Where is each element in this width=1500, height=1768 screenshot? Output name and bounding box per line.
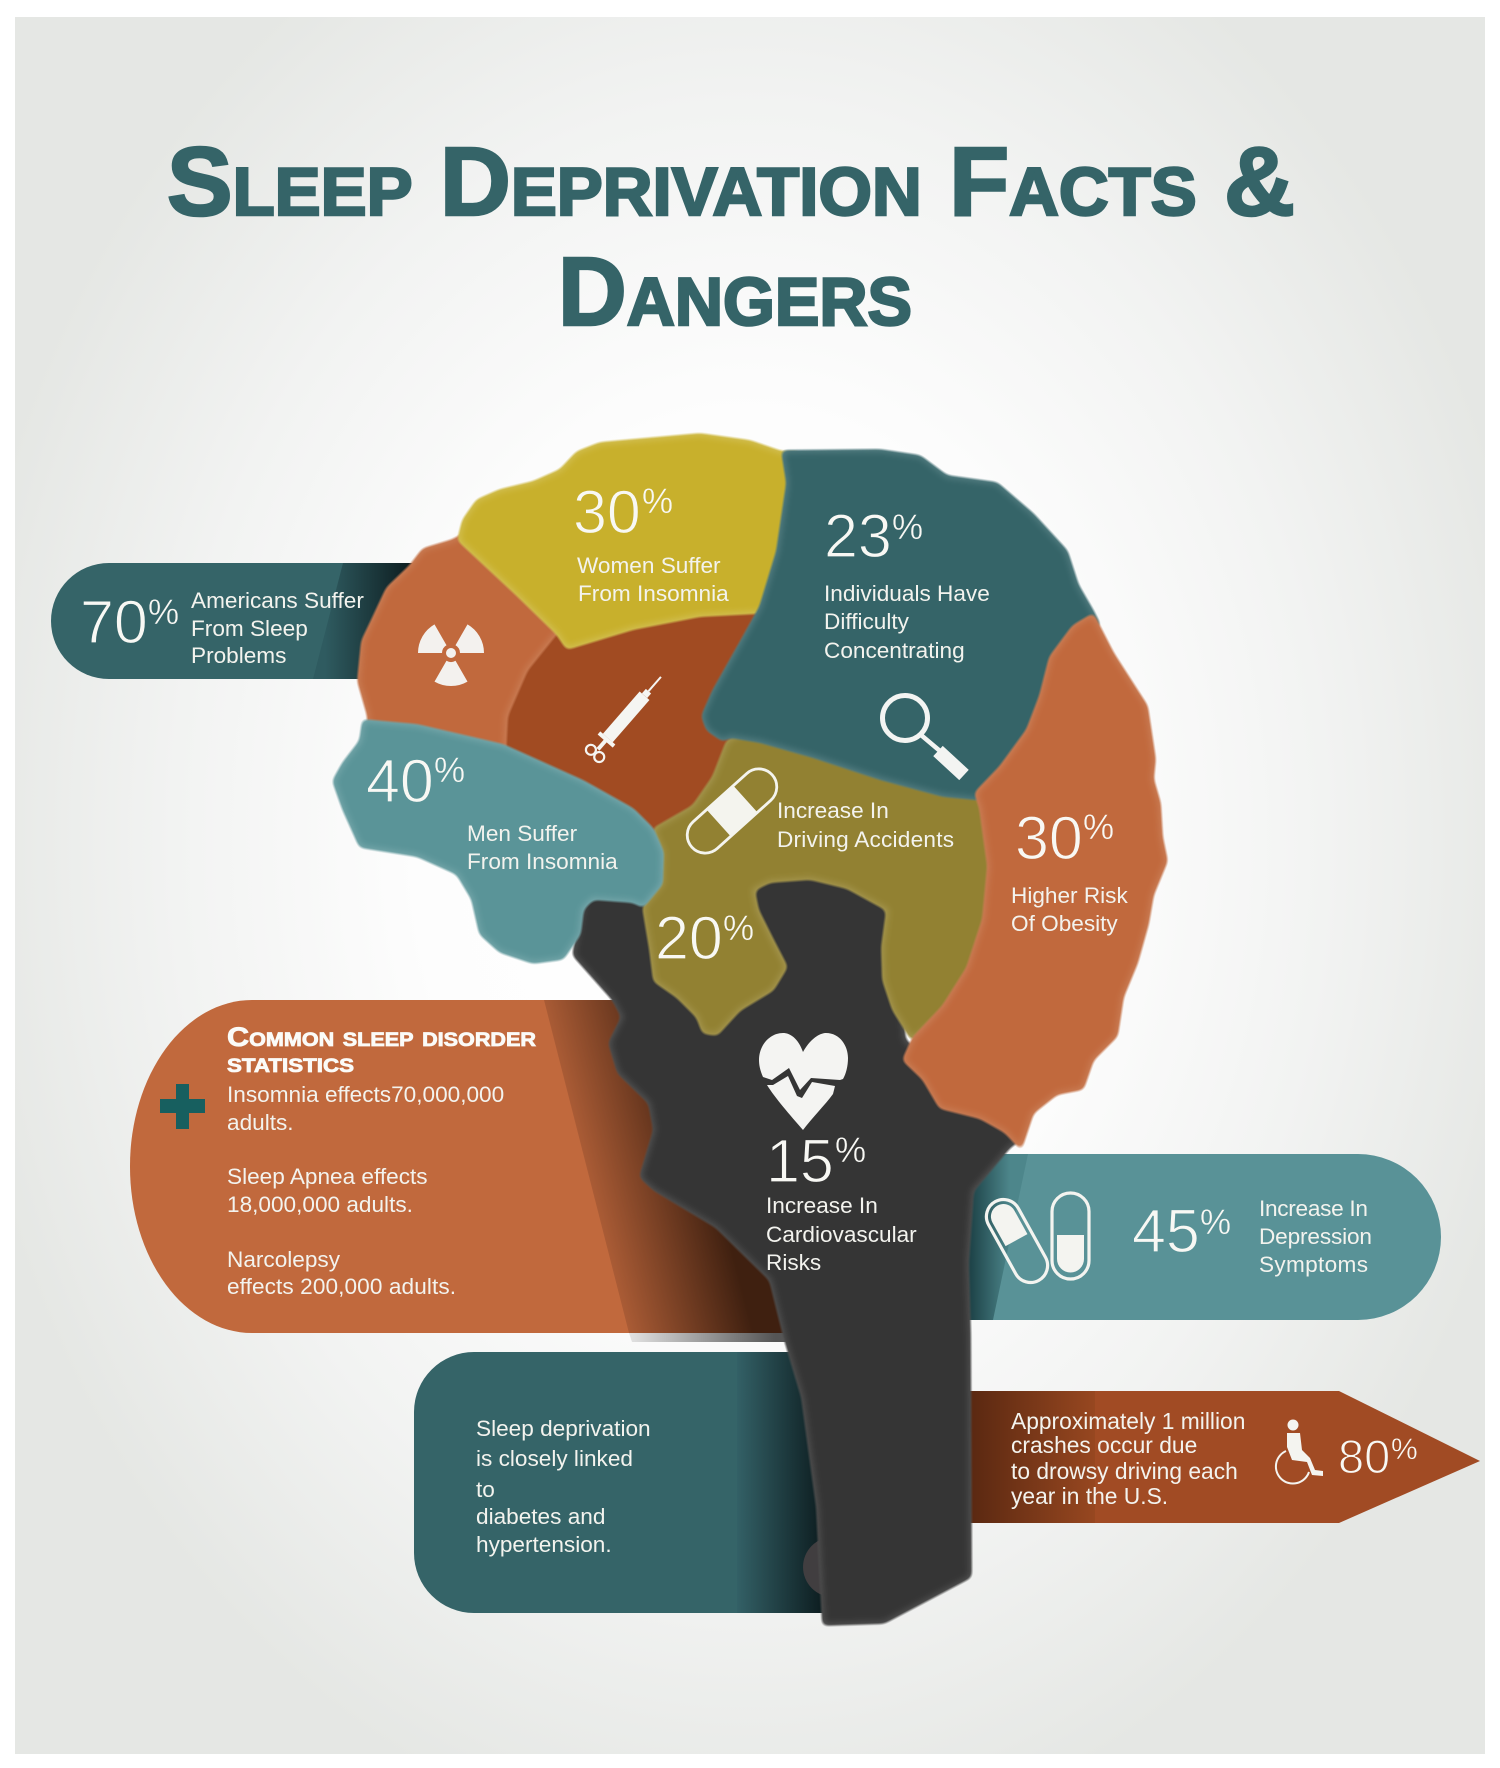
title: [167, 127, 1295, 346]
icon: capsules: [980, 1193, 1089, 1289]
brain stem: 15% cardiovascular: Risks: [766, 1250, 821, 1275]
brain region: 40% men suffer from insomnia: 40: [366, 747, 434, 815]
icon: bandage: [680, 761, 784, 861]
panel: diabetes and hypertension: Sleep deprivation: [476, 1416, 651, 1441]
panel: common sleep disorder statistics: [130, 1000, 800, 1342]
panel: diabetes and hypertension: to: [476, 1477, 495, 1502]
brain region: 40% men suffer from insomnia: %: [434, 751, 465, 790]
brain region: 30% women suffer from insomnia: 30: [573, 478, 641, 546]
brain region: 30% women suffer from insomnia: Women Suffer: [577, 553, 721, 578]
panel: 80% drowsy driving arrow: 80: [1338, 1430, 1390, 1483]
panel: 70% Americans suffer from sleep problems: From Sleep: [191, 616, 308, 641]
brain stem: 15% cardiovascular: 15: [766, 1127, 834, 1195]
icon: magnifying glass: [882, 696, 964, 775]
title: Sleep Deprivation Facts &: [167, 127, 1295, 236]
brain region: 23% difficulty concentrating: Difficulty: [824, 609, 910, 634]
brain region: radiation: [358, 530, 570, 755]
brain stem: 15% cardiovascular: Increase In: [766, 1193, 878, 1218]
panel: 70% Americans suffer from sleep problems: Problems: [191, 643, 286, 668]
brain region: 20% driving accidents: %: [723, 909, 754, 948]
brain region: 30% higher risk of obesity: [903, 614, 1167, 1149]
icon: wheelchair: [1276, 1420, 1323, 1484]
brain region: 40% men suffer from insomnia: [333, 720, 663, 963]
brain region: 30% women suffer from insomnia: %: [642, 482, 673, 521]
brain stem: 15% cardiovascular: Cardiovascular: [766, 1222, 917, 1247]
brain region: syringe: [495, 600, 775, 840]
panel: 70% Americans suffer from sleep problems: Americans Suffer: [191, 588, 364, 613]
panel: 45% increase in depression symptoms: Depression: [1259, 1224, 1372, 1249]
panel: common sleep disorder statistics: statistics: [227, 1048, 354, 1078]
panel: diabetes and hypertension: [414, 1352, 863, 1613]
panel: diabetes and hypertension: hypertension.: [476, 1532, 612, 1557]
panel: 45% increase in depression symptoms: [955, 1154, 1441, 1320]
brain region: 30% women suffer from insomnia: [458, 434, 805, 649]
brain region: 23% difficulty concentrating: Concentrating: [824, 638, 965, 663]
panel: 80% drowsy driving arrow: [960, 1391, 1480, 1523]
brain stem: 15% cardiovascular: %: [835, 1131, 866, 1170]
brain region: 40% men suffer from insomnia: Men Suffer: [467, 821, 578, 846]
brain region: 20% driving accidents: Driving Accidents: [777, 827, 954, 852]
panel: 80% drowsy driving arrow: crashes occur due: [1011, 1432, 1197, 1458]
panel: 45% increase in depression symptoms: Symptoms: [1259, 1252, 1368, 1277]
title: Dangers: [558, 237, 912, 346]
panel: common sleep disorder statistics: Insomnia effects70,000,000: [227, 1082, 504, 1107]
panel: 80% drowsy driving arrow: Approximately 1 million: [1011, 1408, 1245, 1434]
icon: radiation symbol: [418, 624, 484, 686]
brain stem: 15% cardiovascular: [573, 870, 1020, 1625]
brain region: 23% difficulty concentrating: [702, 450, 1100, 800]
brain region: 30% higher risk of obesity: 30: [1015, 804, 1083, 872]
brain region: 30% higher risk of obesity: %: [1083, 808, 1114, 847]
panel: 45% increase in depression symptoms: 45: [1132, 1197, 1200, 1265]
panel: common sleep disorder statistics: Narcolepsy: [227, 1247, 341, 1272]
brain region: 20% driving accidents: [643, 728, 1000, 1040]
brain region: 23% difficulty concentrating: %: [892, 508, 923, 547]
panel: diabetes and hypertension: is closely linked: [476, 1446, 633, 1471]
brain region: 23% difficulty concentrating: 23: [824, 502, 892, 570]
icon: heart with pulse: [759, 1033, 848, 1130]
panel: common sleep disorder statistics: adults.: [227, 1110, 294, 1135]
panel: 70% Americans suffer from sleep problems: %: [148, 593, 179, 632]
brain region: 30% higher risk of obesity: Higher Risk: [1011, 883, 1128, 908]
icon: medical cross: [160, 1084, 205, 1129]
panel: 70% Americans suffer from sleep problems: [51, 563, 430, 679]
panel: 45% increase in depression symptoms: %: [1200, 1203, 1231, 1242]
brain region: 30% women suffer from insomnia: From Insomnia: [578, 581, 729, 606]
panel: 80% drowsy driving arrow: %: [1391, 1433, 1418, 1466]
panel: common sleep disorder statistics: 18,000,000 adults.: [227, 1192, 413, 1217]
icon: syringe: [584, 670, 669, 764]
brain region: 23% difficulty concentrating: Individuals Have: [824, 581, 990, 606]
panel: 80% drowsy driving arrow: year in the U.S.: [1011, 1483, 1168, 1509]
brain region: 40% men suffer from insomnia: From Insomnia: [467, 849, 618, 874]
panel: 70% Americans suffer from sleep problems: 70: [80, 588, 148, 656]
panel: 80% drowsy driving arrow: to drowsy driving each: [1011, 1458, 1238, 1484]
panel: common sleep disorder statistics: effects 200,000 adults.: [227, 1274, 456, 1299]
panel: diabetes and hypertension: diabetes and: [476, 1504, 605, 1529]
panel: 45% increase in depression symptoms: Increase In: [1259, 1196, 1368, 1221]
brain region: 20% driving accidents: 20: [655, 904, 723, 972]
brain region: 30% higher risk of obesity: Of Obesity: [1011, 911, 1118, 936]
brain region: 20% driving accidents: Increase In: [777, 798, 889, 823]
panel: common sleep disorder statistics: Common sleep disorder: [227, 1022, 536, 1052]
panel: common sleep disorder statistics: Sleep Apnea effects: [227, 1164, 428, 1189]
